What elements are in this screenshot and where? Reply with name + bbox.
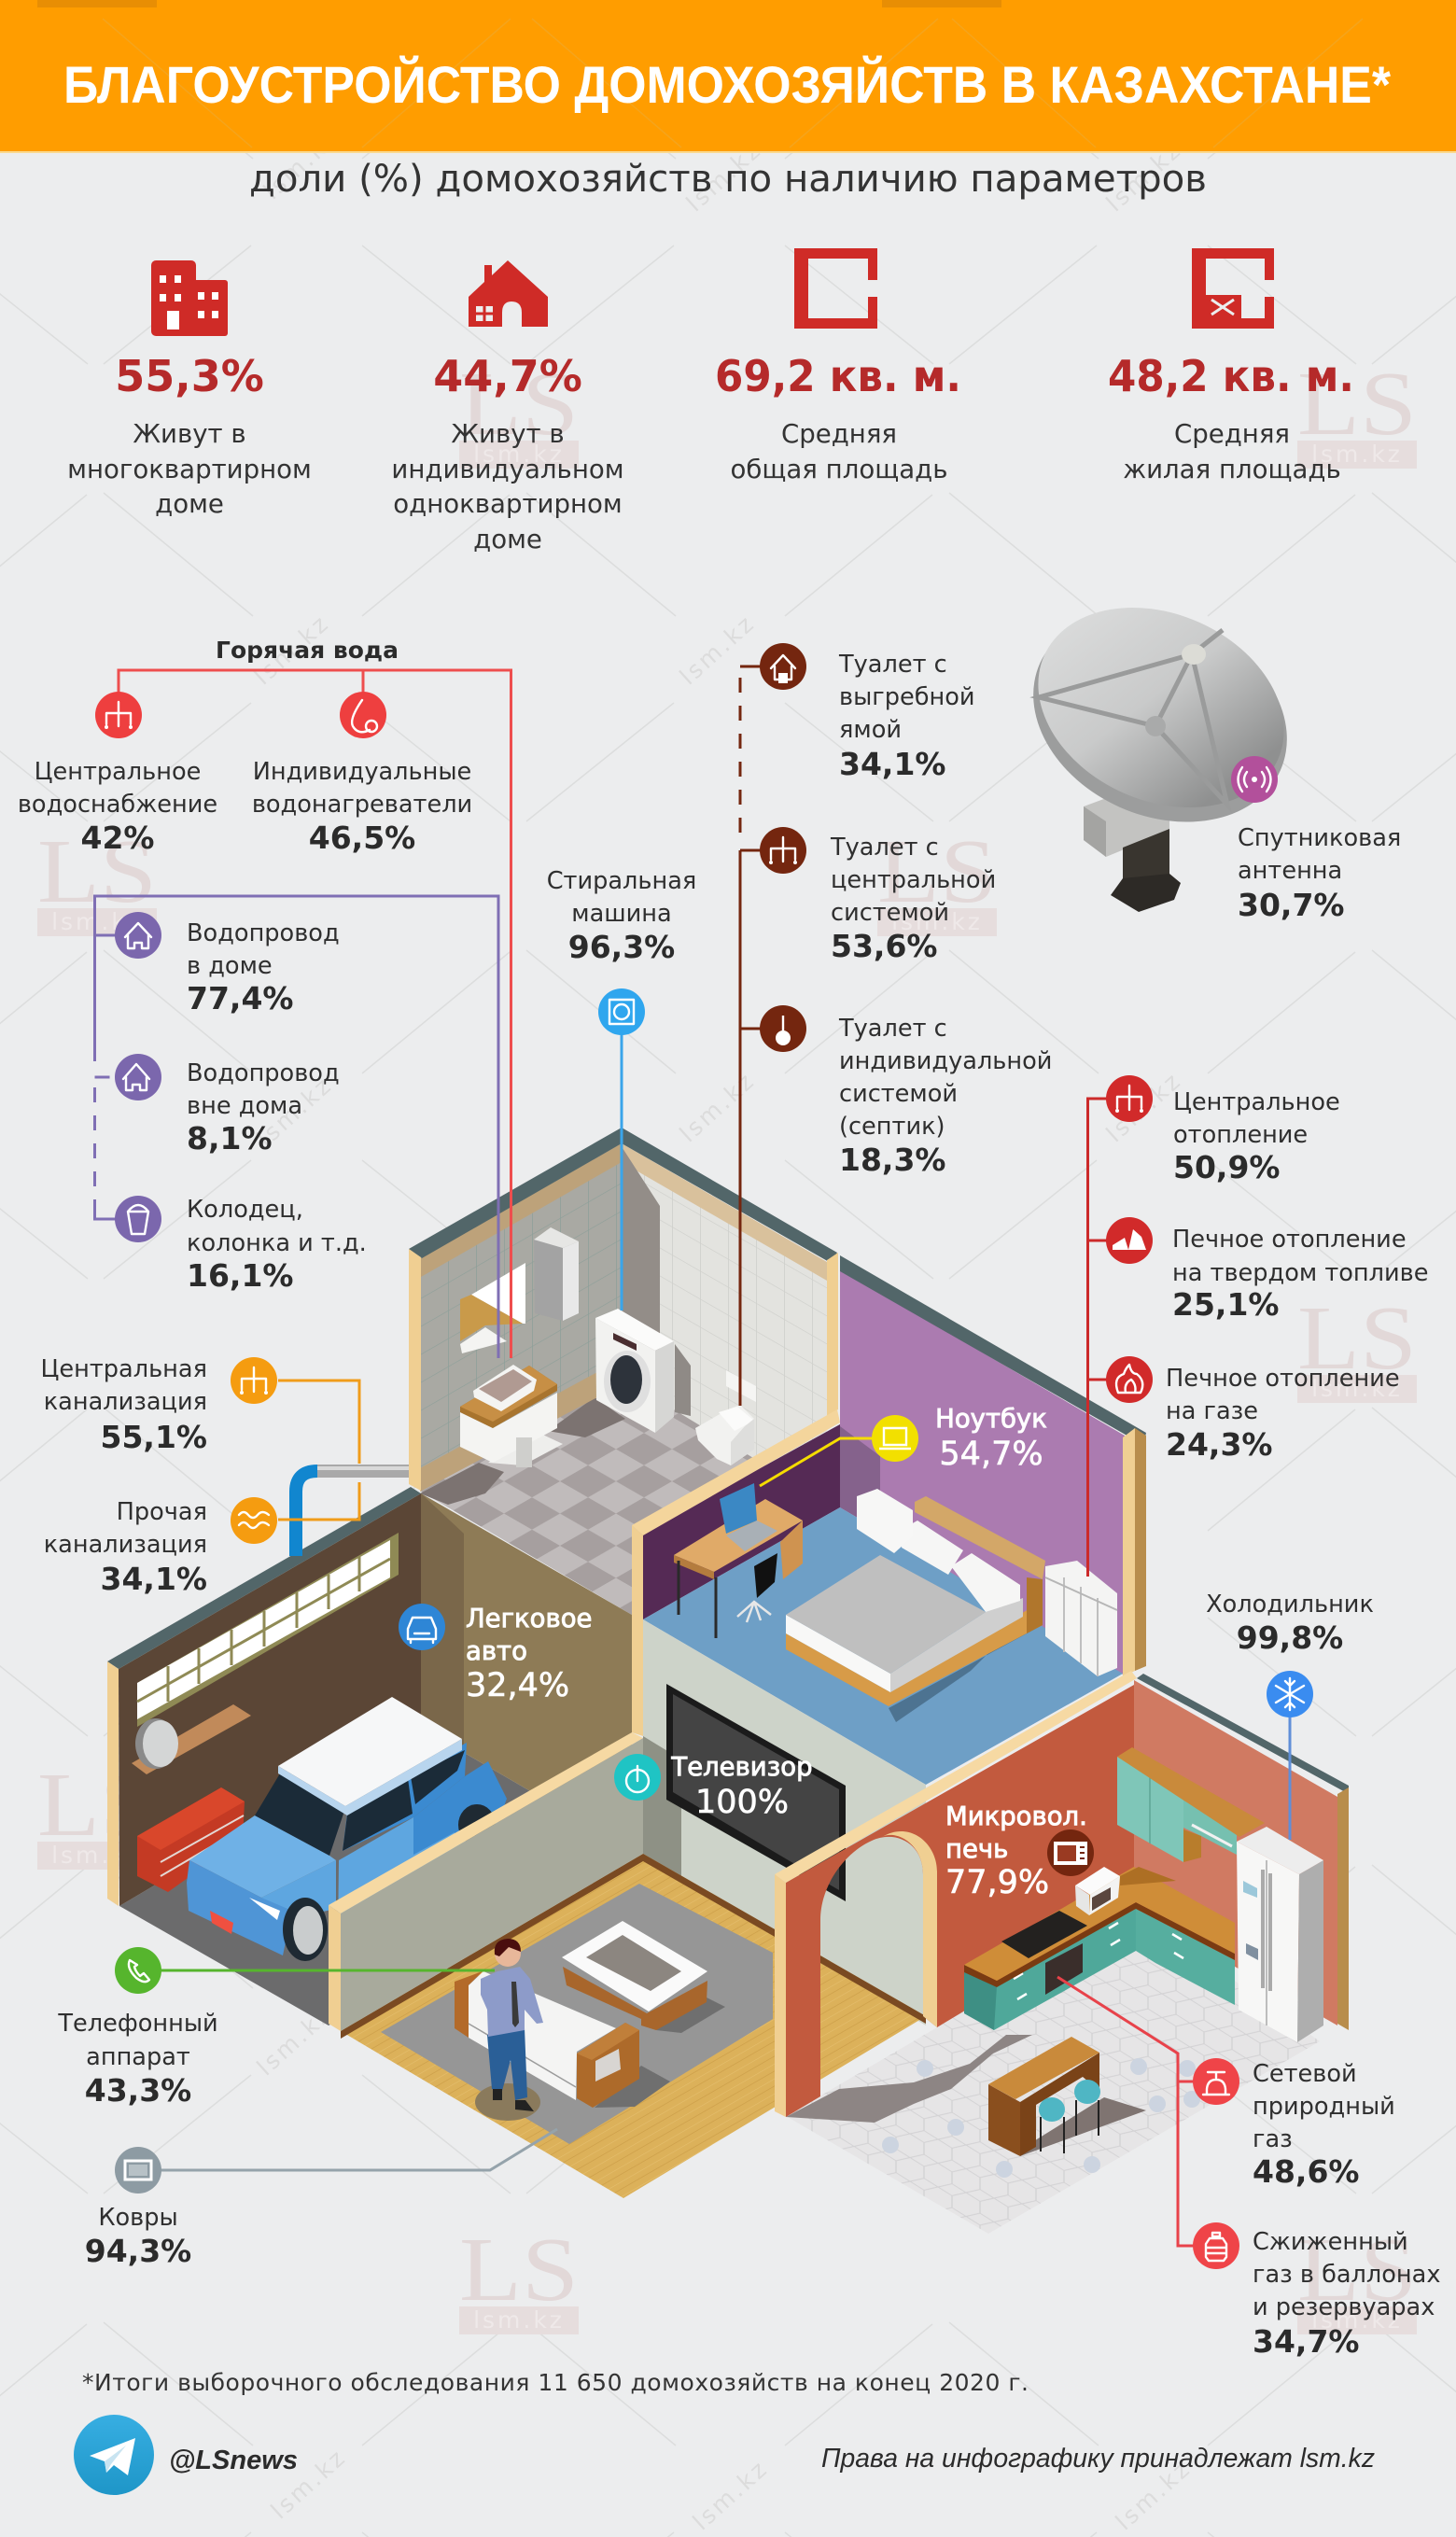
icon: car	[399, 1604, 445, 1650]
icon: apartment building	[151, 260, 228, 336]
telegram logo	[74, 2415, 154, 2495]
central sewerage	[41, 1355, 359, 1464]
icon: house	[469, 260, 548, 327]
text: lsm.kz	[249, 609, 335, 690]
telephone callout: Телефонный	[57, 2010, 218, 2038]
telephone callout	[57, 1947, 495, 2109]
icon: laptop	[872, 1415, 918, 1462]
natural gas: Сетевой	[1253, 2060, 1357, 2088]
mirror and shelf	[460, 1263, 525, 1353]
water pipe in house: Водопровод	[187, 919, 340, 947]
carpet	[381, 1884, 773, 2144]
carpets callout: 94,3%	[85, 2233, 191, 2269]
laptop callout: Ноутбук	[935, 1404, 1047, 1434]
text: lsm.kz	[681, 135, 767, 217]
icon: water drop	[340, 692, 386, 738]
well	[115, 1196, 367, 1294]
icon: power button	[614, 1754, 661, 1801]
icon: floor plan	[794, 248, 877, 329]
stat: apartment buildings: Живут в	[133, 418, 246, 449]
base cabinets	[964, 1867, 1235, 2030]
dark purple wall	[643, 1424, 840, 1619]
icon: central network	[95, 692, 142, 738]
shelf with fan	[132, 1704, 251, 1774]
text: lsm.kz	[473, 2306, 565, 2334]
kitchen floor	[786, 1909, 1320, 2234]
liquefied gas: Сжиженный	[1253, 2228, 1408, 2256]
central water supply: водоснабжение	[18, 791, 217, 819]
toilet with cesspit	[760, 643, 975, 782]
kitchen wall with arch	[775, 1671, 1137, 2117]
carpets callout: Ковры	[98, 2204, 178, 2232]
text: lsm.kz	[1311, 2306, 1403, 2334]
toilet with cesspit: 34,1%	[839, 746, 946, 782]
blue car	[187, 1697, 507, 1961]
other sewerage: Прочая	[117, 1498, 207, 1526]
kitchen room	[775, 1671, 1349, 2234]
television callout: Телевизор	[670, 1752, 813, 1782]
tall cabinet	[534, 1227, 579, 1321]
bathroom floor	[421, 1378, 840, 1615]
toilet with central system: 53,6%	[831, 928, 937, 964]
icon: outhouse	[760, 643, 806, 690]
garage wall cap	[107, 1487, 421, 1669]
television callout	[614, 1752, 813, 1821]
text: lsm.kz	[473, 441, 565, 468]
water pipe outside: Водопровод	[187, 1059, 340, 1087]
icon: waves	[231, 1497, 277, 1544]
icon: washer	[598, 988, 645, 1035]
text: lsm.kz	[1111, 2454, 1197, 2535]
text: lsm.kz	[1101, 135, 1187, 217]
text: lsm.kz	[1101, 1066, 1187, 1147]
television screen	[666, 1684, 846, 1901]
man on the phone	[475, 1939, 543, 2121]
hot water lines	[119, 670, 511, 1358]
other sewerage	[44, 1482, 359, 1597]
text: lsm.kz	[259, 123, 344, 204]
water pipe outside	[115, 1054, 340, 1156]
central sewerage: канализация	[44, 1388, 207, 1416]
individual water heaters	[252, 692, 472, 856]
toilet with septic: 18,3%	[839, 1142, 946, 1178]
icon: septic tank	[760, 1005, 806, 1052]
stools	[1039, 2080, 1100, 2153]
stat: apartment buildings	[67, 260, 312, 519]
purple wall	[840, 1269, 1125, 1675]
washing machine callout: машина	[571, 900, 672, 928]
text: lsm.kz	[1311, 1375, 1403, 1402]
running water lines	[95, 896, 498, 1358]
text: LS	[1297, 1288, 1417, 1389]
toilet with cesspit: ямой	[839, 716, 902, 744]
header banner	[0, 0, 1456, 153]
washing machine	[595, 1309, 674, 1433]
refrigerator	[1237, 1827, 1323, 2042]
icon: snowflake	[1267, 1671, 1313, 1717]
text: lsm.kz	[252, 1071, 338, 1152]
water pipe in house: в доме	[187, 952, 273, 980]
central sewerage: 55,1%	[101, 1419, 207, 1455]
blue floor	[643, 1507, 1123, 1785]
stat: apartment buildings: доме	[155, 488, 224, 519]
stat: living area: жилая площадь	[1123, 454, 1341, 484]
radiator	[1045, 1561, 1117, 1676]
television callout: 100%	[695, 1784, 789, 1821]
telephone callout: аппарат	[86, 2043, 190, 2071]
central water supply: Центральное	[35, 758, 201, 786]
floor shadows	[420, 1397, 625, 1505]
toilet with central system: центральной	[831, 866, 996, 894]
satellite antenna callout: антенна	[1238, 857, 1342, 885]
icon: flame	[1106, 1356, 1153, 1403]
refrigerator callout: 99,8%	[1237, 1619, 1343, 1656]
stat: individual houses: Живут в	[451, 418, 565, 449]
nightstand	[857, 1489, 913, 1553]
text: lsm.kz	[266, 2443, 352, 2524]
text: lsm.kz	[675, 1066, 761, 1147]
other sewerage: канализация	[44, 1531, 207, 1559]
microwave callout: печь	[945, 1834, 1008, 1864]
text: lsm.kz	[891, 908, 983, 935]
icon: bucket	[115, 1196, 161, 1242]
text: lsm.kz	[688, 2454, 774, 2535]
well: 16,1%	[187, 1257, 293, 1294]
toilet with central system	[760, 827, 996, 964]
toilet with cesspit: выгребной	[839, 683, 975, 711]
text: lsm.kz	[252, 1999, 338, 2081]
central heating: Центральное	[1173, 1088, 1340, 1116]
car callout	[399, 1604, 592, 1704]
central heating	[1106, 1075, 1340, 1185]
well: колонка и т.д.	[187, 1229, 367, 1257]
microwave callout	[945, 1801, 1094, 1901]
toilet with cesspit: Туалет с	[838, 651, 947, 679]
individual water heaters: Индивидуальные	[253, 758, 471, 786]
text: lsm.kz	[1097, 604, 1183, 685]
microwave	[1075, 1867, 1176, 1915]
stat: individual houses	[391, 260, 624, 554]
liquefied gas: 34,7%	[1253, 2323, 1359, 2360]
garage room	[107, 1487, 632, 2025]
stat: individual houses: одноквартирном	[393, 488, 623, 519]
sewage pipe	[296, 1465, 409, 1556]
solid fuel heating: на твердом топливе	[1172, 1259, 1428, 1287]
central water supply: 42%	[80, 820, 155, 856]
washing machine callout: 96,3%	[568, 929, 675, 965]
telegram handle: @LSnews	[169, 2446, 298, 2475]
hot water heading: Горячая вода	[216, 637, 399, 664]
well: Колодец,	[187, 1196, 303, 1224]
car callout: 32,4%	[466, 1667, 569, 1704]
kitchen back wall	[1134, 1680, 1337, 2025]
text: LS	[1297, 354, 1417, 455]
icon: signal	[1231, 756, 1278, 803]
bathroom right wall	[622, 1143, 827, 1503]
copyright: Права на инфографику принадлежат lsm.kz	[821, 2444, 1375, 2474]
blue floor tiles	[882, 2058, 1200, 2178]
red tool chest	[137, 1787, 245, 1892]
icon: phone	[115, 1947, 161, 1994]
icon: central network	[760, 827, 806, 874]
toilet with central system: системой	[831, 899, 949, 927]
desk with laptop	[674, 1483, 803, 1638]
liquefied gas	[1193, 2222, 1441, 2360]
icon: floor plan with room	[1192, 248, 1274, 329]
solid fuel heating: 25,1%	[1172, 1286, 1279, 1323]
text: LS	[459, 354, 579, 455]
living room wall cap	[329, 1732, 643, 2031]
central heating: отопление	[1173, 1121, 1308, 1149]
text: LS	[37, 821, 157, 922]
wall caps	[409, 1128, 837, 1263]
garage floor	[119, 1728, 632, 2025]
natural gas	[1193, 2058, 1395, 2190]
washing machine callout	[547, 867, 696, 1311]
heating lines	[1088, 1099, 1129, 1577]
text: lsm.kz	[677, 1999, 763, 2081]
sink cabinet	[460, 1365, 563, 1467]
stat: apartment buildings: 55,3%	[115, 351, 264, 401]
right wall post	[1123, 1428, 1146, 1676]
upper cabinets	[1117, 1747, 1265, 1862]
satellite antenna callout: 30,7%	[1238, 887, 1344, 923]
satellite dish	[1000, 570, 1321, 912]
central water supply	[18, 692, 217, 856]
central heating: 50,9%	[1173, 1149, 1281, 1185]
stat: living area: Средняя	[1174, 418, 1290, 449]
icon: coal	[1106, 1217, 1153, 1264]
individual water heaters: водонагреватели	[252, 791, 472, 819]
icon: gas cylinder	[1193, 2222, 1239, 2269]
liquefied gas: газ в баллонах	[1253, 2261, 1441, 2289]
text: lsm.kz	[675, 609, 761, 690]
garage window	[137, 1533, 399, 1727]
car callout: авто	[466, 1636, 527, 1666]
bed	[786, 1496, 1045, 1722]
water pipe in house	[115, 912, 340, 1016]
telephone callout: 43,3%	[85, 2072, 191, 2109]
living room	[329, 1732, 926, 2198]
dining table	[988, 2037, 1099, 2156]
stat: individual houses: индивидуальном	[391, 454, 624, 484]
bathroom left wall	[421, 1143, 622, 1492]
refrigerator callout: Холодильник	[1206, 1591, 1374, 1619]
icon: gas valve	[1193, 2058, 1239, 2105]
microwave callout: 77,9%	[945, 1864, 1049, 1901]
solid fuel heating: Печное отопление	[1172, 1226, 1407, 1254]
stat: total area	[715, 248, 961, 484]
wall below bedroom with TV	[643, 1619, 926, 2025]
toilet with central system: Туалет с	[830, 834, 939, 862]
icon: house with x	[115, 1054, 161, 1100]
text: LS	[1297, 2220, 1417, 2320]
subtitle: доли (%) домохозяйств по наличию параметров	[249, 158, 1207, 201]
stat: total area: Средняя	[781, 418, 897, 449]
central sewerage: Центральная	[41, 1355, 207, 1383]
stat: individual houses: доме	[473, 524, 542, 554]
satellite antenna callout: Спутниковая	[1238, 824, 1401, 852]
stat: individual houses: 44,7%	[433, 351, 582, 401]
icon: carpet	[115, 2147, 161, 2194]
toilet with septic: индивидуальной	[839, 1047, 1052, 1075]
other sewerage: 34,1%	[101, 1561, 207, 1597]
washing machine callout: Стиральная	[547, 867, 696, 895]
toilet with septic: системой	[839, 1080, 958, 1108]
toilet	[695, 1370, 756, 1465]
text: lsm.kz	[1311, 441, 1403, 468]
individual water heaters: 46,5%	[309, 820, 415, 856]
satellite antenna callout	[1231, 756, 1401, 923]
toilet lines	[740, 666, 783, 1406]
laptop callout: 54,7%	[939, 1436, 1043, 1473]
water pipe outside: вне дома	[187, 1092, 302, 1120]
natural gas: 48,6%	[1253, 2153, 1359, 2190]
liquefied gas: и резервуарах	[1253, 2293, 1435, 2321]
stat: total area: общая площадь	[731, 454, 947, 484]
microwave callout: Микровол.	[945, 1801, 1087, 1831]
text: lsm.kz	[51, 1842, 143, 1869]
toilet with septic: (септик)	[839, 1113, 945, 1141]
water pipe outside: 8,1%	[187, 1120, 273, 1156]
solid fuel heating	[1106, 1217, 1428, 1323]
gas stove heating: на газе	[1166, 1397, 1258, 1425]
garage right wall	[421, 1493, 632, 1850]
sofa	[455, 1971, 670, 2108]
laptop callout	[760, 1404, 1047, 1486]
icon: house with tap	[115, 912, 161, 959]
text: lsm.kz	[51, 908, 143, 935]
coffee table	[562, 1921, 725, 2033]
refrigerator callout	[1206, 1591, 1374, 1840]
bathroom room	[409, 1128, 840, 1615]
toilet with septic: Туалет с	[838, 1015, 947, 1043]
wood floor	[341, 1854, 926, 2198]
living room wall	[341, 1738, 643, 2031]
car callout: Легковое	[466, 1604, 592, 1633]
bedroom front wall cap	[632, 1409, 840, 1736]
icon: microwave	[1047, 1829, 1094, 1876]
icon: central network	[231, 1357, 277, 1404]
natural gas: природный	[1253, 2093, 1395, 2121]
text: LS	[459, 2220, 579, 2320]
toilet with septic	[760, 1005, 1052, 1178]
text: LS	[37, 1755, 157, 1856]
garage left wall	[119, 1493, 421, 1906]
footnote: *Итоги выборочного обследования 11 650 домохозяйств на конец 2020 г.	[82, 2369, 1029, 2396]
stat: living area	[1108, 248, 1354, 484]
cooktop	[1001, 1911, 1087, 1958]
gas lines	[1057, 1977, 1216, 2246]
gas stove heating: Печное отопление	[1166, 1365, 1400, 1393]
stat: living area: 48,2 кв. м.	[1108, 351, 1354, 401]
stat: total area: 69,2 кв. м.	[715, 351, 961, 401]
gas stove heating	[1106, 1356, 1400, 1463]
water pipe in house: 77,4%	[187, 980, 293, 1016]
stat: apartment buildings: многоквартирном	[67, 454, 312, 484]
natural gas: газ	[1253, 2125, 1293, 2153]
gas stove heating: 24,3%	[1166, 1426, 1273, 1463]
bedroom room	[632, 1255, 1146, 2025]
icon: central network	[1106, 1075, 1153, 1122]
carpets callout	[85, 2129, 557, 2269]
title: БЛАГОУСТРОЙСТВО ДОМОХОЗЯЙСТВ В КАЗАХСТАНЕ*	[63, 55, 1391, 114]
text: LS	[877, 821, 997, 922]
